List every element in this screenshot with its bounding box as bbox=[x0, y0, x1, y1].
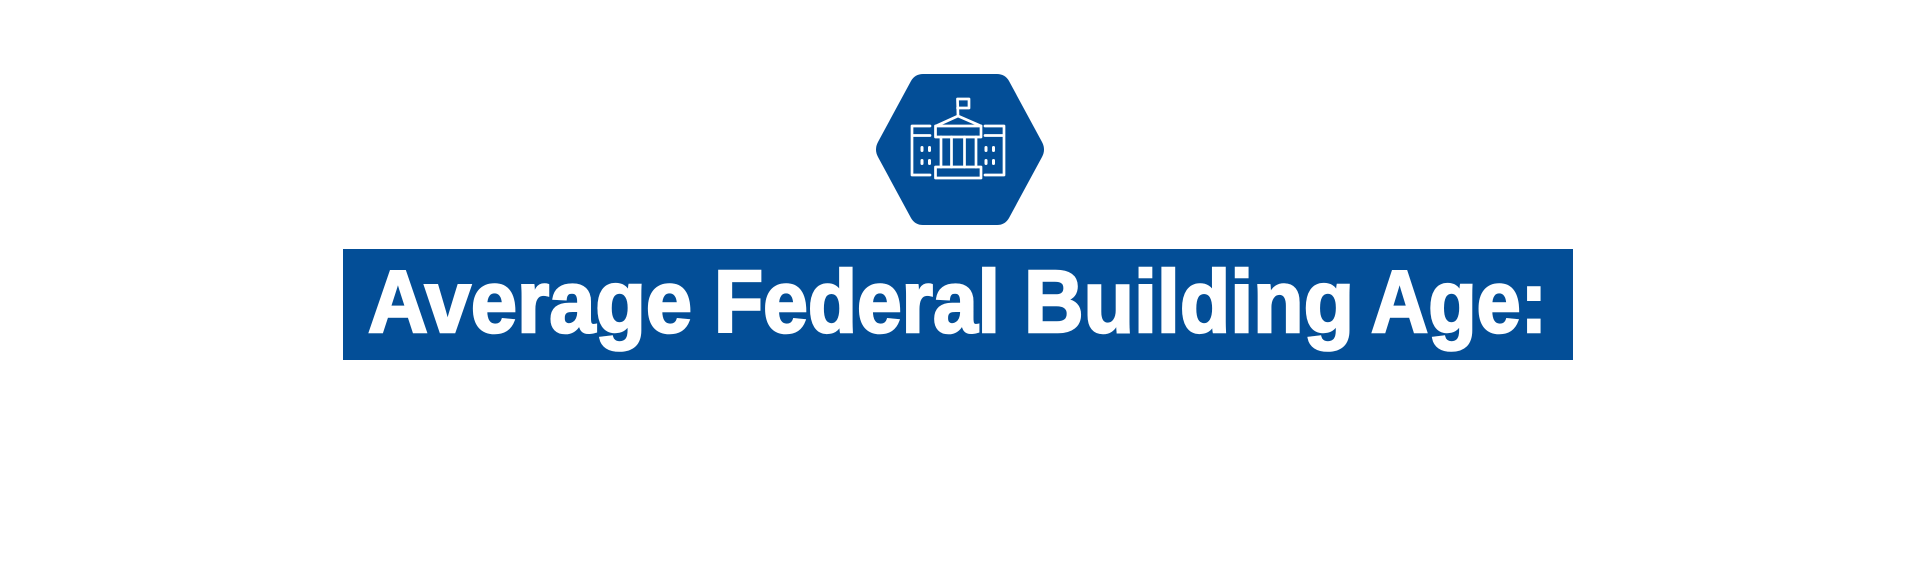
title banner bbox=[343, 249, 1573, 360]
icon: government building bbox=[912, 99, 1004, 178]
title text: Building bbox=[1024, 252, 1354, 351]
title text: Federal bbox=[714, 252, 1000, 351]
hexagon badge bbox=[876, 74, 1044, 225]
banner background bbox=[343, 249, 1573, 360]
title text: Average bbox=[368, 252, 692, 351]
title text: Age: bbox=[1371, 252, 1547, 351]
title text bbox=[368, 252, 1547, 351]
icon: hexagon badge with government building bbox=[876, 74, 1044, 225]
